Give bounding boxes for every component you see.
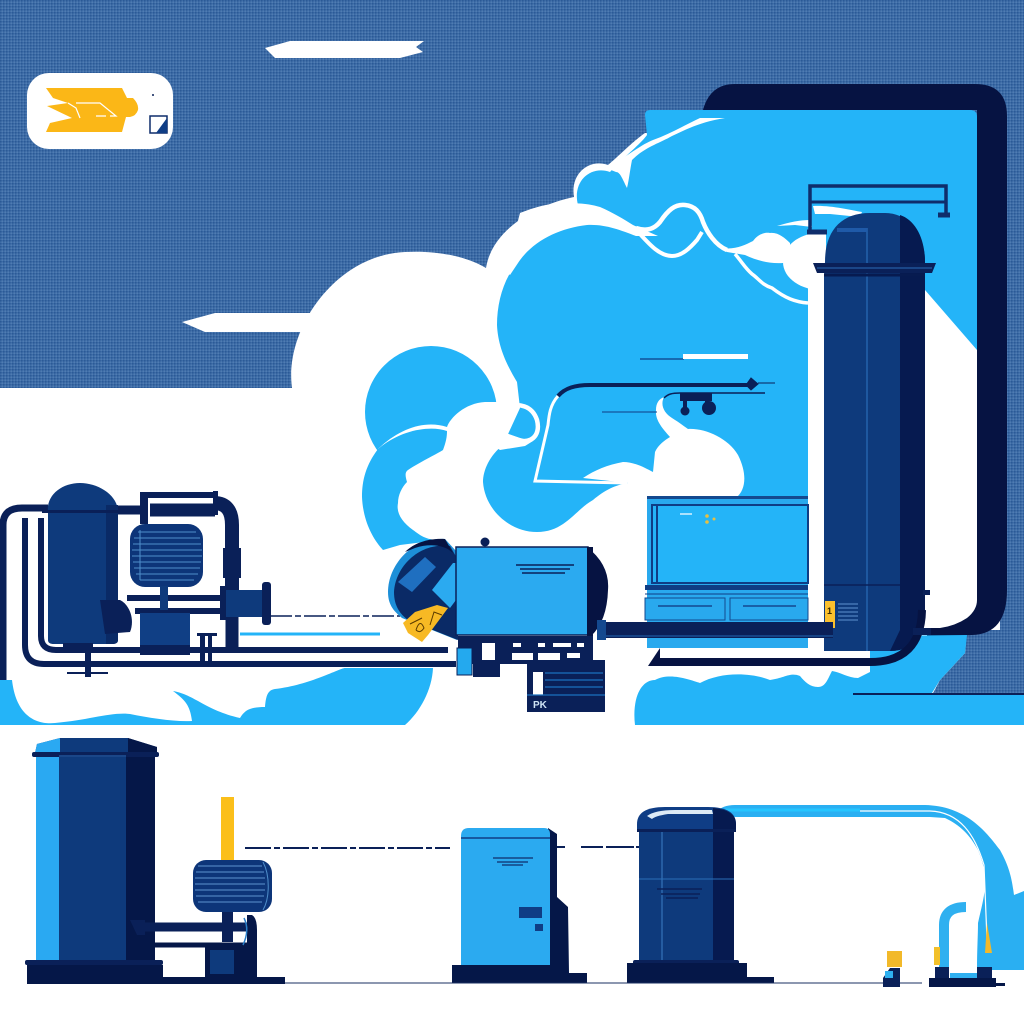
frame bracket above tower (807, 186, 950, 232)
line: thin navy horizon (853, 693, 1024, 695)
yellow tower tag: 1 (827, 606, 832, 616)
panel: large blue cloud shape (483, 224, 808, 532)
line: blue pipe highlight (240, 632, 380, 636)
logo badge (27, 73, 173, 149)
left vertical tank (42, 483, 122, 653)
panel: blue circle cloud (365, 346, 497, 478)
lower panel: tank one (25, 738, 285, 984)
panel: white strip left of the tower (808, 300, 825, 660)
panel: blue sky area behind the tower (577, 110, 977, 350)
central pump: frame and transformer: PK (533, 700, 548, 711)
panel: top white wedge streak (606, 118, 725, 188)
banner: middle white streak (182, 313, 312, 332)
panel: dark navy backing frame (703, 84, 1007, 637)
pump and valves (100, 491, 271, 661)
panel: blue wave bottom left (0, 668, 433, 725)
panel: white hook around small blue blob (497, 396, 627, 483)
lower panel: yellow marker (221, 797, 234, 860)
panel: halftone sky background (0, 0, 1024, 696)
banner: top white streak (265, 41, 424, 58)
lower panel: tank two (627, 807, 774, 983)
panel: white cloud right (583, 397, 744, 500)
motor (130, 524, 203, 587)
panel: large white cloud (0, 118, 1000, 725)
central pump: outlet pipe (597, 620, 833, 640)
line: thin floor line (285, 982, 922, 984)
lower panel: blue overhead pipe (717, 805, 1024, 970)
lower panel: blue cabinet unit (452, 828, 587, 983)
lower panel: dashed connector one (245, 847, 450, 849)
lower panel: outlet fittings (883, 947, 1005, 987)
lower panel: motor and pump (130, 860, 272, 977)
panel: blue wave bottom right (634, 635, 1024, 725)
lower panel: dashed connector two (557, 846, 640, 848)
central pump: blue box (456, 538, 608, 637)
tower tank (648, 213, 936, 666)
central pump: round housing (388, 539, 458, 640)
left pipework (3, 495, 456, 680)
panel: white cloud patch over circle (378, 402, 520, 545)
central pump: frame and transformer (457, 636, 605, 712)
line: dashed connector left (270, 615, 400, 617)
panel: blue crescent cloud (362, 429, 447, 550)
yellow tower tag (825, 601, 858, 628)
warning tag (403, 605, 448, 642)
panel: white ribbon wisps (505, 203, 862, 303)
cabinet (645, 496, 808, 648)
floating pipe and valve (558, 354, 775, 416)
